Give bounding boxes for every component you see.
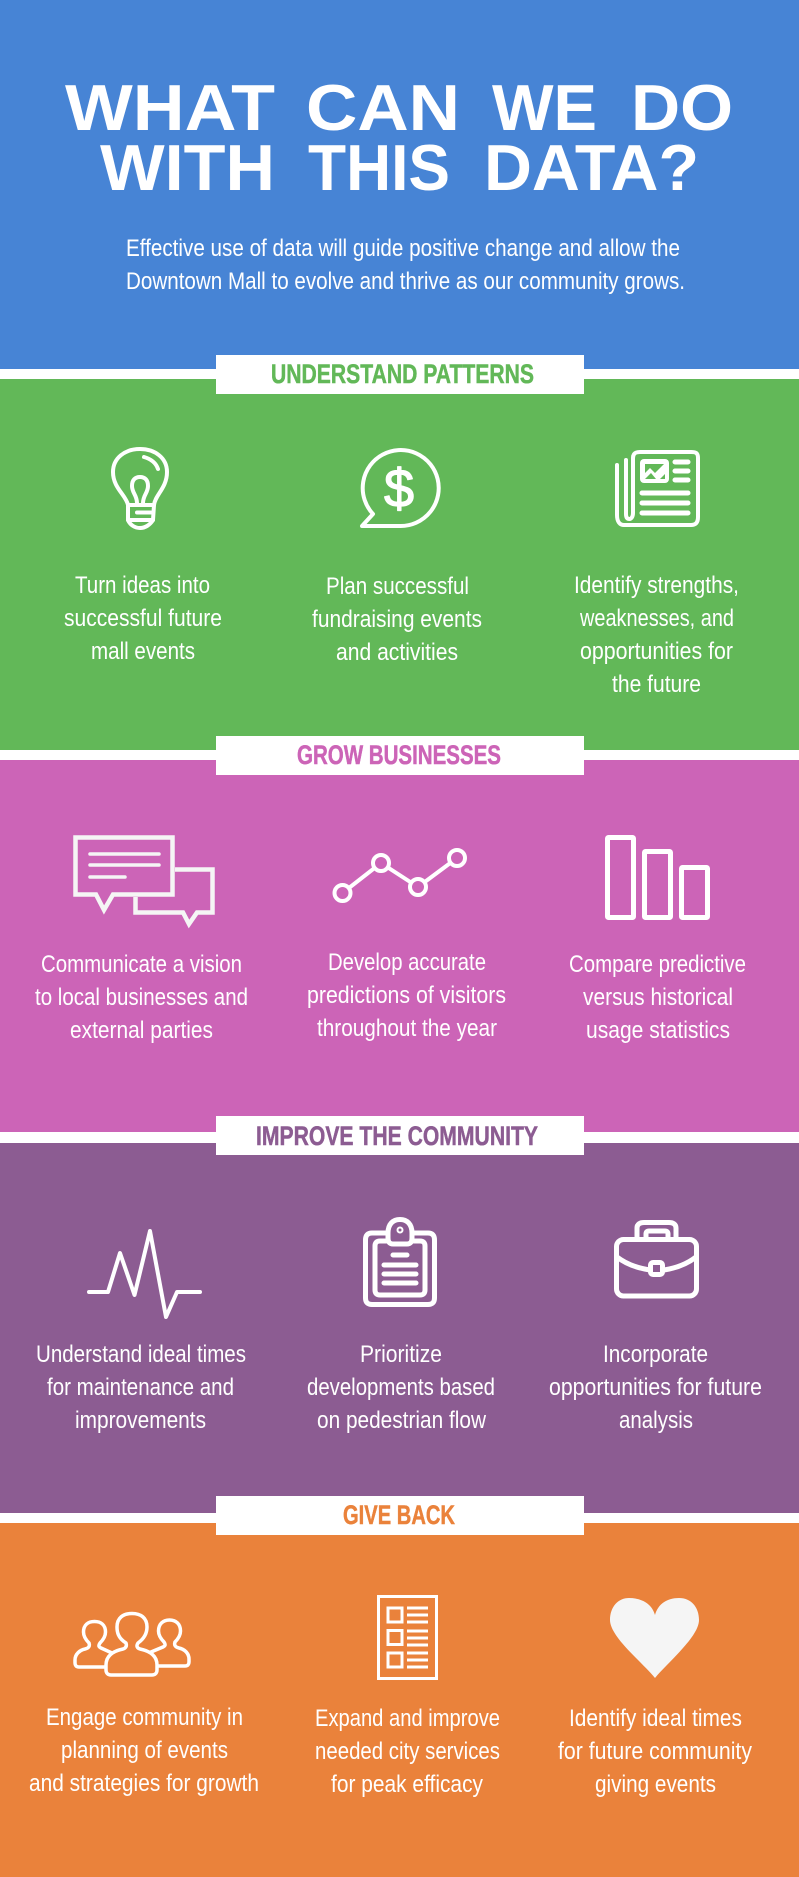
panel: give back bbox=[0, 1496, 799, 1877]
icon: clipboard bbox=[366, 1220, 434, 1304]
icon: dollar speech bubble: $ bbox=[384, 459, 414, 519]
text: communicate a vision: to local businesses and bbox=[35, 984, 248, 1011]
text: turn ideas bbox=[64, 572, 222, 665]
text: expand city services: Expand and improve bbox=[315, 1705, 500, 1732]
text: compare statistics bbox=[569, 951, 746, 1044]
heading: understand patterns bbox=[216, 355, 584, 394]
text: understand ideal times: for maintenance and bbox=[47, 1374, 234, 1401]
text: communicate a vision: external parties bbox=[70, 1017, 213, 1044]
text: develop predictions bbox=[307, 949, 506, 1042]
panel: understand patterns bbox=[0, 355, 799, 750]
text: develop predictions: predictions of visitors bbox=[307, 982, 506, 1009]
icon: chat bubbles bbox=[76, 838, 212, 924]
title bbox=[65, 71, 733, 204]
text: communicate a vision bbox=[35, 951, 248, 1044]
icon: pulse line bbox=[89, 1231, 200, 1317]
text: plan fundraising bbox=[312, 573, 482, 666]
text: plan fundraising: fundraising events bbox=[312, 606, 482, 633]
text: understand ideal times: improvements bbox=[75, 1407, 206, 1434]
text: identify strengths: opportunities for bbox=[580, 638, 733, 665]
text: expand city services bbox=[315, 1705, 500, 1798]
text: plan fundraising: Plan successful bbox=[326, 573, 469, 600]
text: compare statistics: usage statistics bbox=[586, 1017, 730, 1044]
heading: give back bbox=[216, 1496, 584, 1535]
text: identify giving times: for future community bbox=[558, 1738, 753, 1765]
icon: people group bbox=[75, 1614, 189, 1675]
icon: heart bbox=[610, 1598, 699, 1678]
title: DATA? bbox=[484, 131, 699, 204]
text: understand ideal times: Understand ideal times bbox=[36, 1341, 246, 1368]
intro text: Downtown Mall to evolve and thrive as our community grows. bbox=[126, 268, 685, 295]
heading: improve the community bbox=[216, 1116, 584, 1155]
text: prioritize developments: Prioritize bbox=[360, 1341, 442, 1368]
intro text bbox=[126, 235, 685, 295]
text: develop predictions: throughout the year bbox=[317, 1015, 497, 1042]
icon: checklist form bbox=[378, 1596, 436, 1678]
panel: grow businesses bbox=[0, 736, 799, 1132]
heading: understand patterns: UNDERSTAND PATTERNS bbox=[271, 359, 534, 389]
icon: briefcase bbox=[616, 1222, 696, 1296]
icon: line chart bbox=[334, 850, 465, 901]
text: prioritize developments: on pedestrian flow bbox=[317, 1407, 486, 1434]
text: identify giving times bbox=[558, 1705, 753, 1798]
text: engage community: Engage community in bbox=[46, 1704, 243, 1731]
text: engage community: planning of events bbox=[61, 1737, 228, 1764]
text: expand city services: for peak efficacy bbox=[331, 1771, 484, 1798]
title: WE bbox=[492, 71, 597, 144]
text: compare statistics: Compare predictive bbox=[569, 951, 746, 978]
text: incorporate opportunities: analysis bbox=[619, 1407, 693, 1434]
text: identify strengths: the future bbox=[612, 671, 701, 698]
heading: give back: GIVE BACK bbox=[343, 1500, 455, 1530]
title: WITH bbox=[100, 131, 275, 204]
text: turn ideas: Turn ideas into bbox=[75, 572, 210, 599]
text: identify strengths: Identify strengths, bbox=[574, 572, 739, 599]
text: turn ideas: mall events bbox=[91, 638, 195, 665]
icon: bar chart bbox=[608, 838, 708, 918]
text: prioritize developments bbox=[307, 1341, 495, 1434]
text: plan fundraising: and activities bbox=[336, 639, 458, 666]
text: incorporate opportunities: Incorporate bbox=[603, 1341, 708, 1368]
text: identify giving times: giving events bbox=[595, 1771, 716, 1798]
heading: grow businesses bbox=[216, 736, 584, 775]
intro text: Effective use of data will guide positive change and allow the bbox=[126, 235, 680, 262]
text: communicate a vision: Communicate a vision bbox=[41, 951, 242, 978]
text: identify strengths: weaknesses, and bbox=[579, 605, 734, 632]
text: engage community bbox=[29, 1704, 259, 1797]
text: identify strengths bbox=[574, 572, 739, 698]
panel: improve the community bbox=[0, 1116, 799, 1513]
text: incorporate opportunities: opportunities for future bbox=[549, 1374, 762, 1401]
panel: header bbox=[0, 0, 799, 369]
icon: light bulb bbox=[113, 449, 167, 528]
icon: newspaper bbox=[617, 452, 698, 525]
title: DO bbox=[631, 71, 733, 144]
text: develop predictions: Develop accurate bbox=[328, 949, 486, 976]
text: prioritize developments: developments based bbox=[307, 1374, 495, 1401]
title: WHAT bbox=[65, 71, 275, 144]
text: engage community: and strategies for growth bbox=[29, 1770, 259, 1797]
icon: dollar speech bubble bbox=[362, 450, 439, 526]
title: THIS bbox=[308, 131, 450, 204]
title: CAN bbox=[306, 71, 460, 144]
text: understand ideal times bbox=[36, 1341, 246, 1434]
heading: grow businesses: GROW BUSINESSES bbox=[297, 740, 501, 770]
text: incorporate opportunities bbox=[549, 1341, 762, 1434]
text: identify giving times: Identify ideal times bbox=[569, 1705, 742, 1732]
text: turn ideas: successful future bbox=[64, 605, 222, 632]
text: compare statistics: versus historical bbox=[583, 984, 733, 1011]
heading: improve the community: IMPROVE THE COMMUNITY bbox=[256, 1121, 538, 1151]
text: expand city services: needed city services bbox=[315, 1738, 500, 1765]
